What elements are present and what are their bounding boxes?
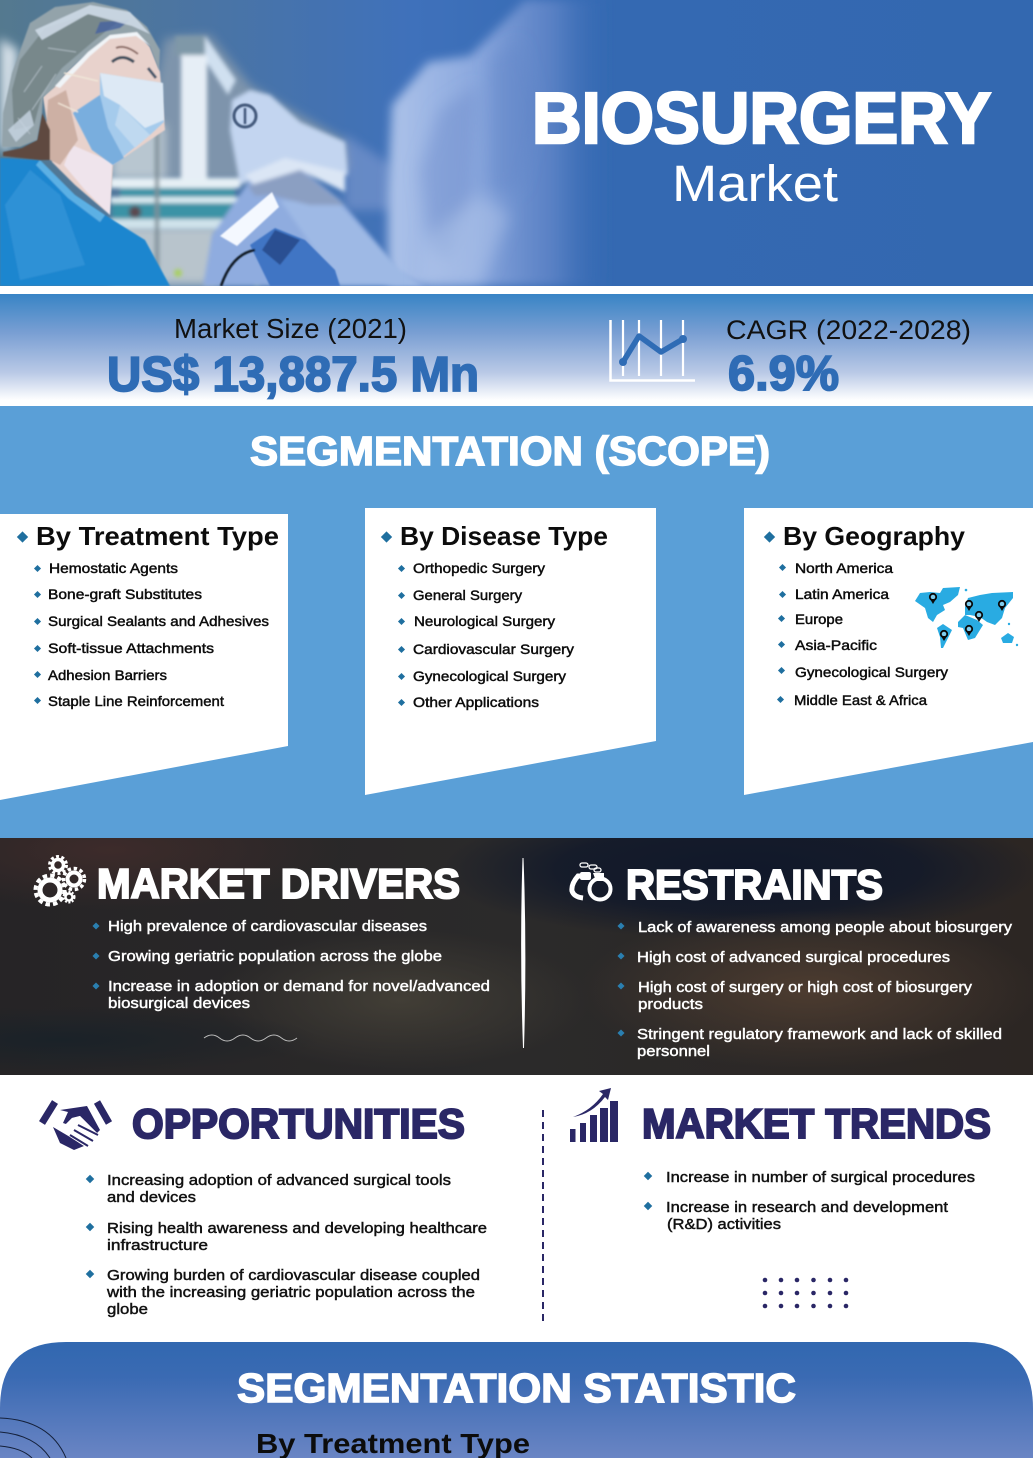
market trends list: Increase in number of surgical procedures	[666, 1169, 975, 1186]
dark panel: drivers and restraints	[0, 838, 1033, 1075]
opportunities list: Rising health awareness and developing healthcare	[107, 1220, 487, 1237]
market drivers list: High prevalence of cardiovascular diseases	[108, 918, 427, 935]
surgeon hair net	[2, 2, 160, 147]
disease list: Other Applications	[413, 694, 539, 710]
surgeon neck and face	[3, 33, 165, 215]
market trends list: Increase in research and development	[666, 1199, 949, 1216]
geography list: Middle East & Africa	[794, 692, 927, 708]
market trends block	[570, 1088, 991, 1308]
treatment heading: By Treatment Type	[36, 521, 279, 551]
market drivers block	[36, 856, 490, 1041]
hero photo: surgeon and robotic arm	[0, 0, 620, 287]
treatment list: Staple Line Reinforcement	[48, 693, 224, 709]
card: by treatment type	[0, 514, 288, 800]
opportunities list: Growing burden of cardiovascular disease coupled	[107, 1267, 480, 1284]
market drivers list: Growing geriatric population across the globe	[108, 948, 442, 965]
geography list: Asia-Pacific	[795, 637, 877, 653]
icon: handshake	[42, 1102, 109, 1150]
segmentation scope panel	[0, 406, 1033, 838]
icon: line chart	[610, 320, 695, 380]
hero banner	[0, 0, 1033, 287]
treatment list: Surgical Sealants and Adhesives	[48, 613, 269, 629]
geography heading: By Geography	[783, 521, 966, 551]
market drivers heading: MARKET DRIVERS	[97, 860, 460, 907]
surgical mask	[58, 73, 164, 165]
restraints list: High cost of surgery or high cost of biosurgery	[638, 979, 973, 996]
market drivers list: biosurgical devices	[108, 995, 250, 1012]
geography list	[777, 560, 948, 708]
treatment list	[34, 560, 269, 709]
restraints list: Stringent regulatory framework and lack of skilled	[637, 1026, 1002, 1043]
restraints list	[617, 919, 1013, 1060]
geography list: Europe	[795, 611, 843, 627]
restraints heading: RESTRAINTS	[626, 861, 883, 908]
disease list	[398, 560, 574, 710]
treatment list: Bone-graft Substitutes	[48, 586, 202, 602]
opportunities list: globe	[107, 1301, 148, 1318]
market drivers list: Increase in adoption or demand for novel/advanced	[108, 978, 490, 995]
restraints list: products	[638, 996, 703, 1013]
title	[535, 90, 992, 202]
disease list: Orthopedic Surgery	[413, 560, 545, 576]
key metrics band	[0, 294, 1033, 406]
icon: handcuffs	[572, 863, 610, 900]
treatment list: Hemostatic Agents	[49, 560, 178, 576]
card: by geography	[744, 508, 1033, 795]
opportunities list: and devices	[107, 1189, 196, 1206]
statistic heading: SEGMENTATION STATISTIC	[237, 1365, 796, 1411]
disease list: Cardiovascular Surgery	[413, 641, 574, 657]
disease list: Gynecological Surgery	[413, 668, 566, 684]
geography list: Latin America	[795, 586, 889, 602]
opportunities list: Increasing adoption of advanced surgical tools	[107, 1172, 451, 1189]
segmentation statistic panel	[0, 1342, 1033, 1458]
restraints list: High cost of advanced surgical procedures	[637, 949, 950, 966]
restraints list: personnel	[637, 1043, 710, 1060]
market trends list: (R&D) activities	[667, 1216, 781, 1233]
segmentation heading: SEGMENTATION (SCOPE)	[250, 428, 770, 474]
treatment list: Adhesion Barriers	[48, 667, 167, 683]
geography list: Gynecological Surgery	[795, 664, 948, 680]
card: by disease type	[365, 508, 656, 795]
market drivers list	[92, 918, 490, 1012]
opportunities heading: OPPORTUNITIES	[132, 1100, 465, 1147]
opportunities list	[86, 1172, 487, 1318]
surgeon gown	[0, 158, 170, 286]
opportunities list: with the increasing geriatric population across the	[106, 1284, 475, 1301]
market trends list	[644, 1169, 975, 1233]
disease list: Neurological Surgery	[414, 613, 555, 629]
opportunities block	[42, 1100, 487, 1318]
market size label: Market Size (2021)	[174, 313, 407, 344]
subtitle: Market	[672, 155, 838, 212]
market trends heading: MARKET TRENDS	[642, 1100, 991, 1147]
restraints block	[572, 861, 1013, 1060]
CAGR value: 6.9%	[728, 347, 839, 401]
treatment list: Soft-tissue Attachments	[48, 640, 214, 656]
title: BIOSURGERY	[532, 79, 991, 159]
geography list: North America	[795, 560, 893, 576]
icon: growth bars with arrow	[570, 1088, 618, 1142]
disease list: General Surgery	[413, 587, 522, 603]
disease heading: By Disease Type	[400, 521, 608, 551]
icon: gears	[36, 856, 84, 904]
CAGR label: CAGR (2022-2028)	[726, 315, 971, 345]
market size value: US$ 13,887.5 Mn	[107, 348, 479, 402]
opportunities list: infrastructure	[107, 1237, 208, 1254]
restraints list: Lack of awareness among people about biosurgery	[638, 919, 1013, 936]
icon: world map with pins	[915, 587, 1018, 648]
